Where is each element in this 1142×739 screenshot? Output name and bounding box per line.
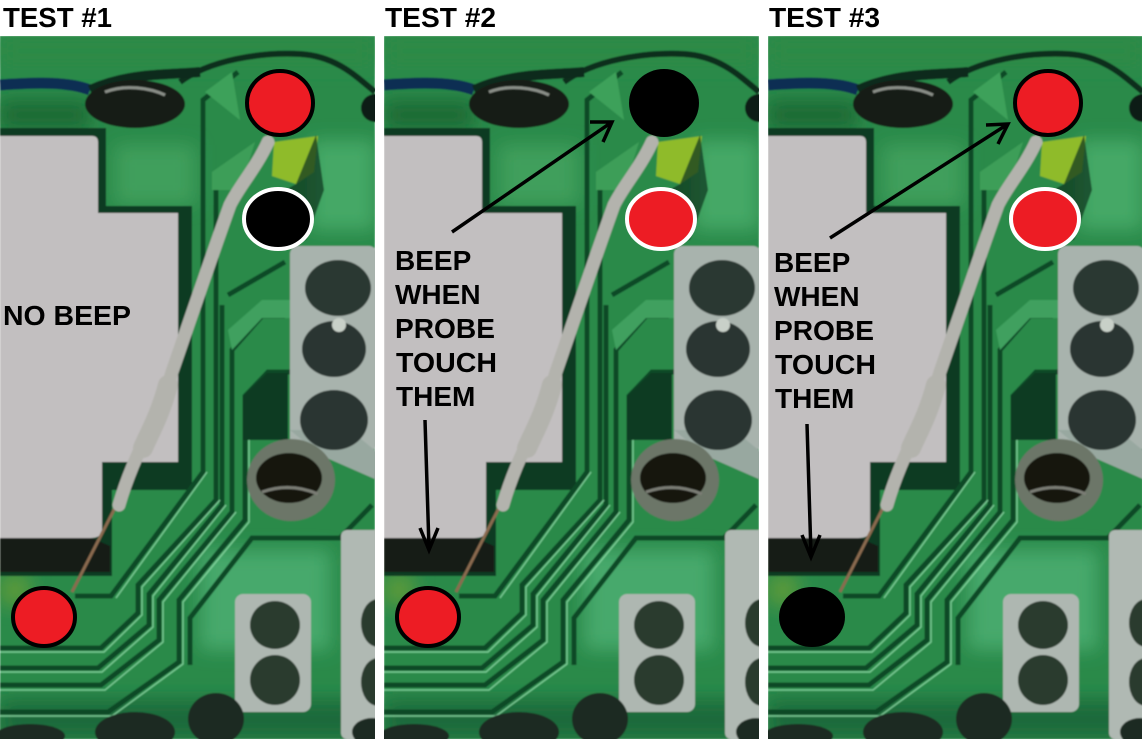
label: no beep: NO BEEP xyxy=(3,300,131,331)
arrow: to bottom point xyxy=(420,420,438,550)
callout: beep when probe touch them: THEM xyxy=(396,381,475,412)
probe point: middle black xyxy=(244,189,312,249)
callout: beep when probe touch them: THEM xyxy=(775,383,854,414)
probe point: bottom red xyxy=(397,588,459,646)
arrow: to top point xyxy=(452,122,612,232)
panel: test 1 xyxy=(0,2,395,739)
probe point: middle red xyxy=(627,189,695,249)
callout: beep when probe touch them: PROBE xyxy=(774,315,874,346)
probe point: top red xyxy=(1015,71,1081,135)
probe point: bottom black xyxy=(779,587,845,647)
callout: beep when probe touch them: PROBE xyxy=(395,313,495,344)
arrow: to top point xyxy=(830,124,1008,238)
callout: beep when probe touch them: BEEP xyxy=(395,245,471,276)
panel: test 2 xyxy=(379,2,779,739)
callout: beep when probe touch them: WHEN xyxy=(395,279,481,310)
heading: test 1: TEST #1 xyxy=(3,2,112,33)
callout: beep when probe touch them xyxy=(395,245,497,412)
callout: beep when probe touch them: TOUCH xyxy=(775,349,876,380)
callout: beep when probe touch them: WHEN xyxy=(774,281,860,312)
heading: test 2: TEST #2 xyxy=(385,2,496,33)
probe point: bottom red xyxy=(13,588,75,646)
callout: beep when probe touch them: TOUCH xyxy=(396,347,497,378)
photo: circuit board test 3 xyxy=(763,36,1142,739)
arrow: to bottom point xyxy=(802,424,820,557)
probe point: middle red xyxy=(1011,189,1079,249)
heading: test 3: TEST #3 xyxy=(769,2,880,33)
photo: circuit board test 1 xyxy=(0,36,395,739)
callout: beep when probe touch them: BEEP xyxy=(774,247,850,278)
callout: beep when probe touch them xyxy=(774,247,876,414)
panel: test 3 xyxy=(763,2,1142,739)
probe point: top red xyxy=(247,71,313,135)
photo: circuit board test 2 xyxy=(379,36,779,739)
probe point: top black xyxy=(629,69,699,137)
